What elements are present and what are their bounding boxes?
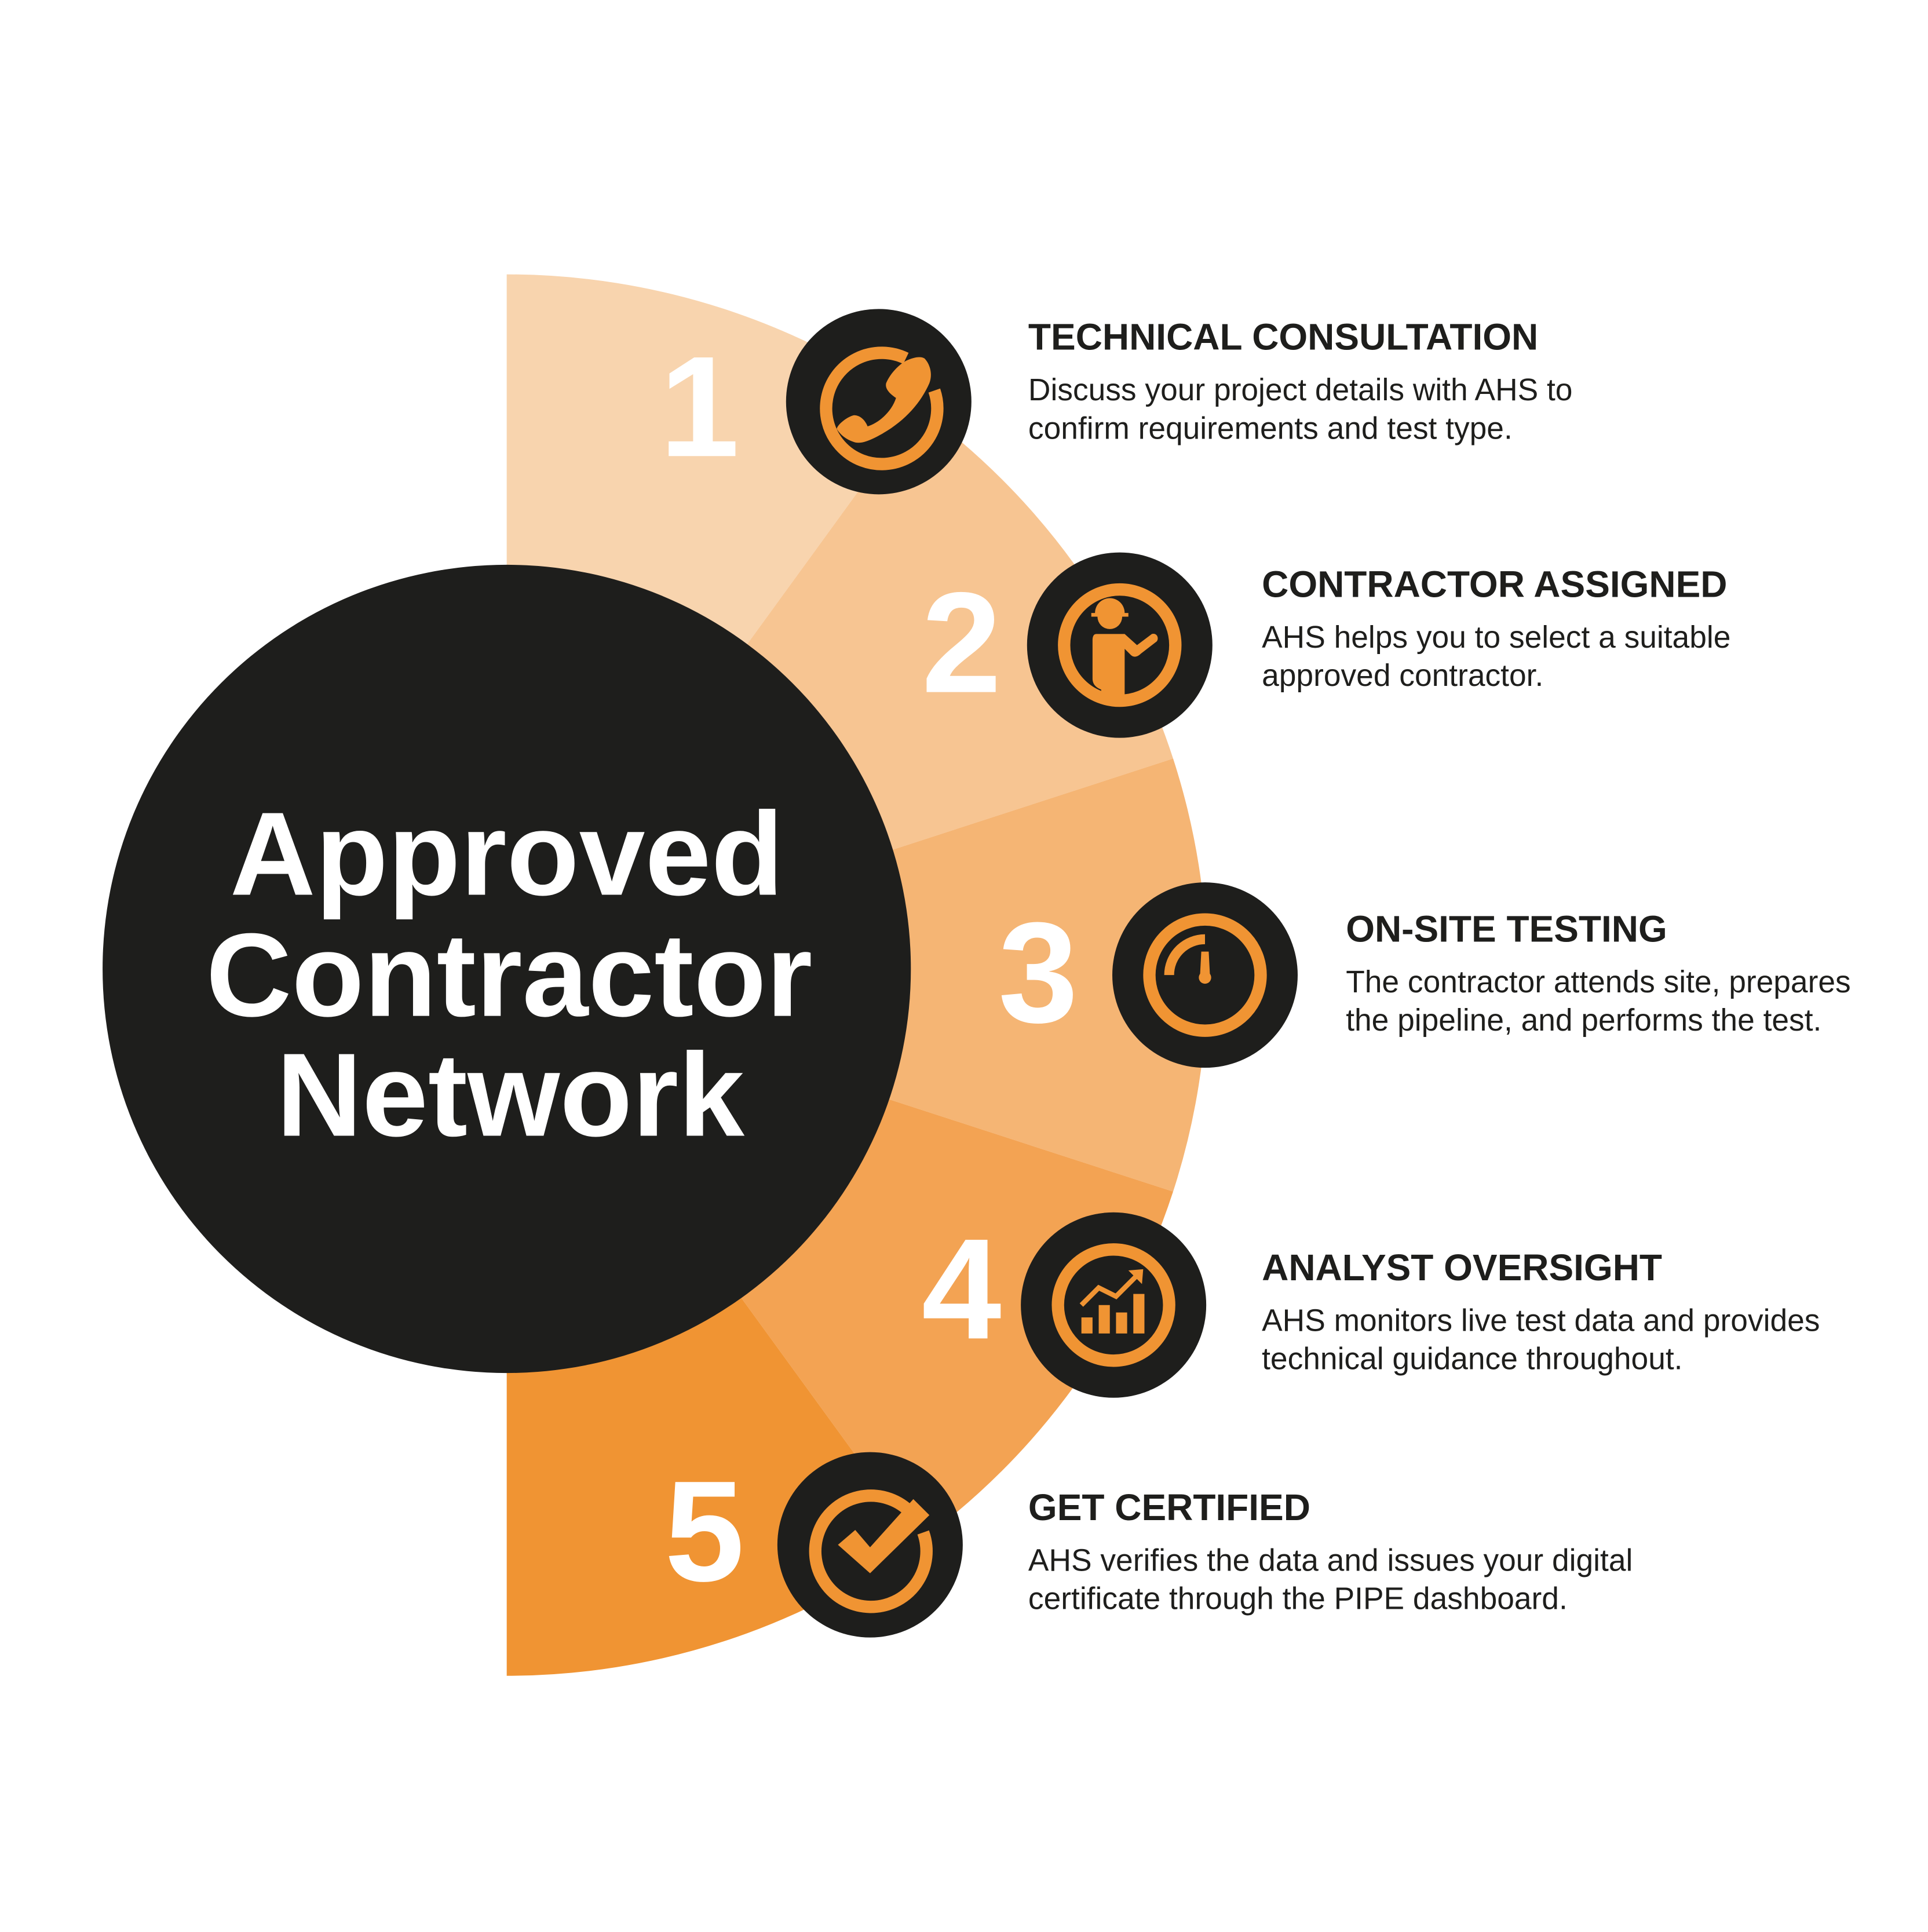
central circle title: Contractor (206, 910, 812, 1042)
step numbers (660, 327, 1078, 1612)
central circle title (103, 565, 911, 1373)
step numbers: 2 (922, 563, 1002, 723)
step numbers: 1 (660, 327, 739, 487)
step 1 text: TECHNICAL CONSULTATION (1028, 316, 1538, 358)
icon 4: chart (1021, 1212, 1206, 1398)
step numbers: 4 (922, 1209, 1002, 1369)
step 4 text (1262, 1247, 1820, 1376)
step 5 text: AHS verifies the data and issues your digital (1028, 1543, 1633, 1577)
step 4 text: technical guidance throughout. (1262, 1342, 1683, 1376)
step 3 text: The contractor attends site, prepares (1346, 965, 1851, 999)
step 3 text (1346, 908, 1851, 1038)
icon 1: phone (786, 309, 972, 494)
step 4 text: ANALYST OVERSIGHT (1262, 1247, 1662, 1288)
step 2 text (1262, 563, 1730, 693)
step numbers: 5 (664, 1452, 744, 1612)
central circle title: Approved (230, 788, 784, 921)
step texts (1028, 316, 1851, 1616)
step 1 text (1028, 316, 1572, 445)
step 4 text: AHS monitors live test data and provides (1262, 1304, 1820, 1338)
semicircle segments (507, 275, 1207, 1676)
icon 2: worker (1027, 553, 1213, 738)
step 5 text: GET CERTIFIED (1028, 1487, 1310, 1528)
step 3 text: the pipeline, and performs the test. (1346, 1003, 1821, 1038)
step 5 text: certificate through the PIPE dashboard. (1028, 1582, 1568, 1616)
step 2 text: AHS helps you to select a suitable (1262, 620, 1730, 655)
step 5 text (1028, 1487, 1633, 1616)
step 2 text: CONTRACTOR ASSIGNED (1262, 563, 1728, 605)
step numbers: 3 (998, 893, 1078, 1053)
icon 5: check (777, 1452, 963, 1638)
step 3 text: ON-SITE TESTING (1346, 908, 1667, 950)
icon 3: gauge (1112, 882, 1298, 1068)
step 1 text: Discuss your project details with AHS to (1028, 373, 1572, 407)
step 1 text: confirm requirements and test type. (1028, 411, 1513, 445)
central circle title: Network (276, 1029, 745, 1162)
step 2 text: approved contractor. (1262, 659, 1543, 693)
